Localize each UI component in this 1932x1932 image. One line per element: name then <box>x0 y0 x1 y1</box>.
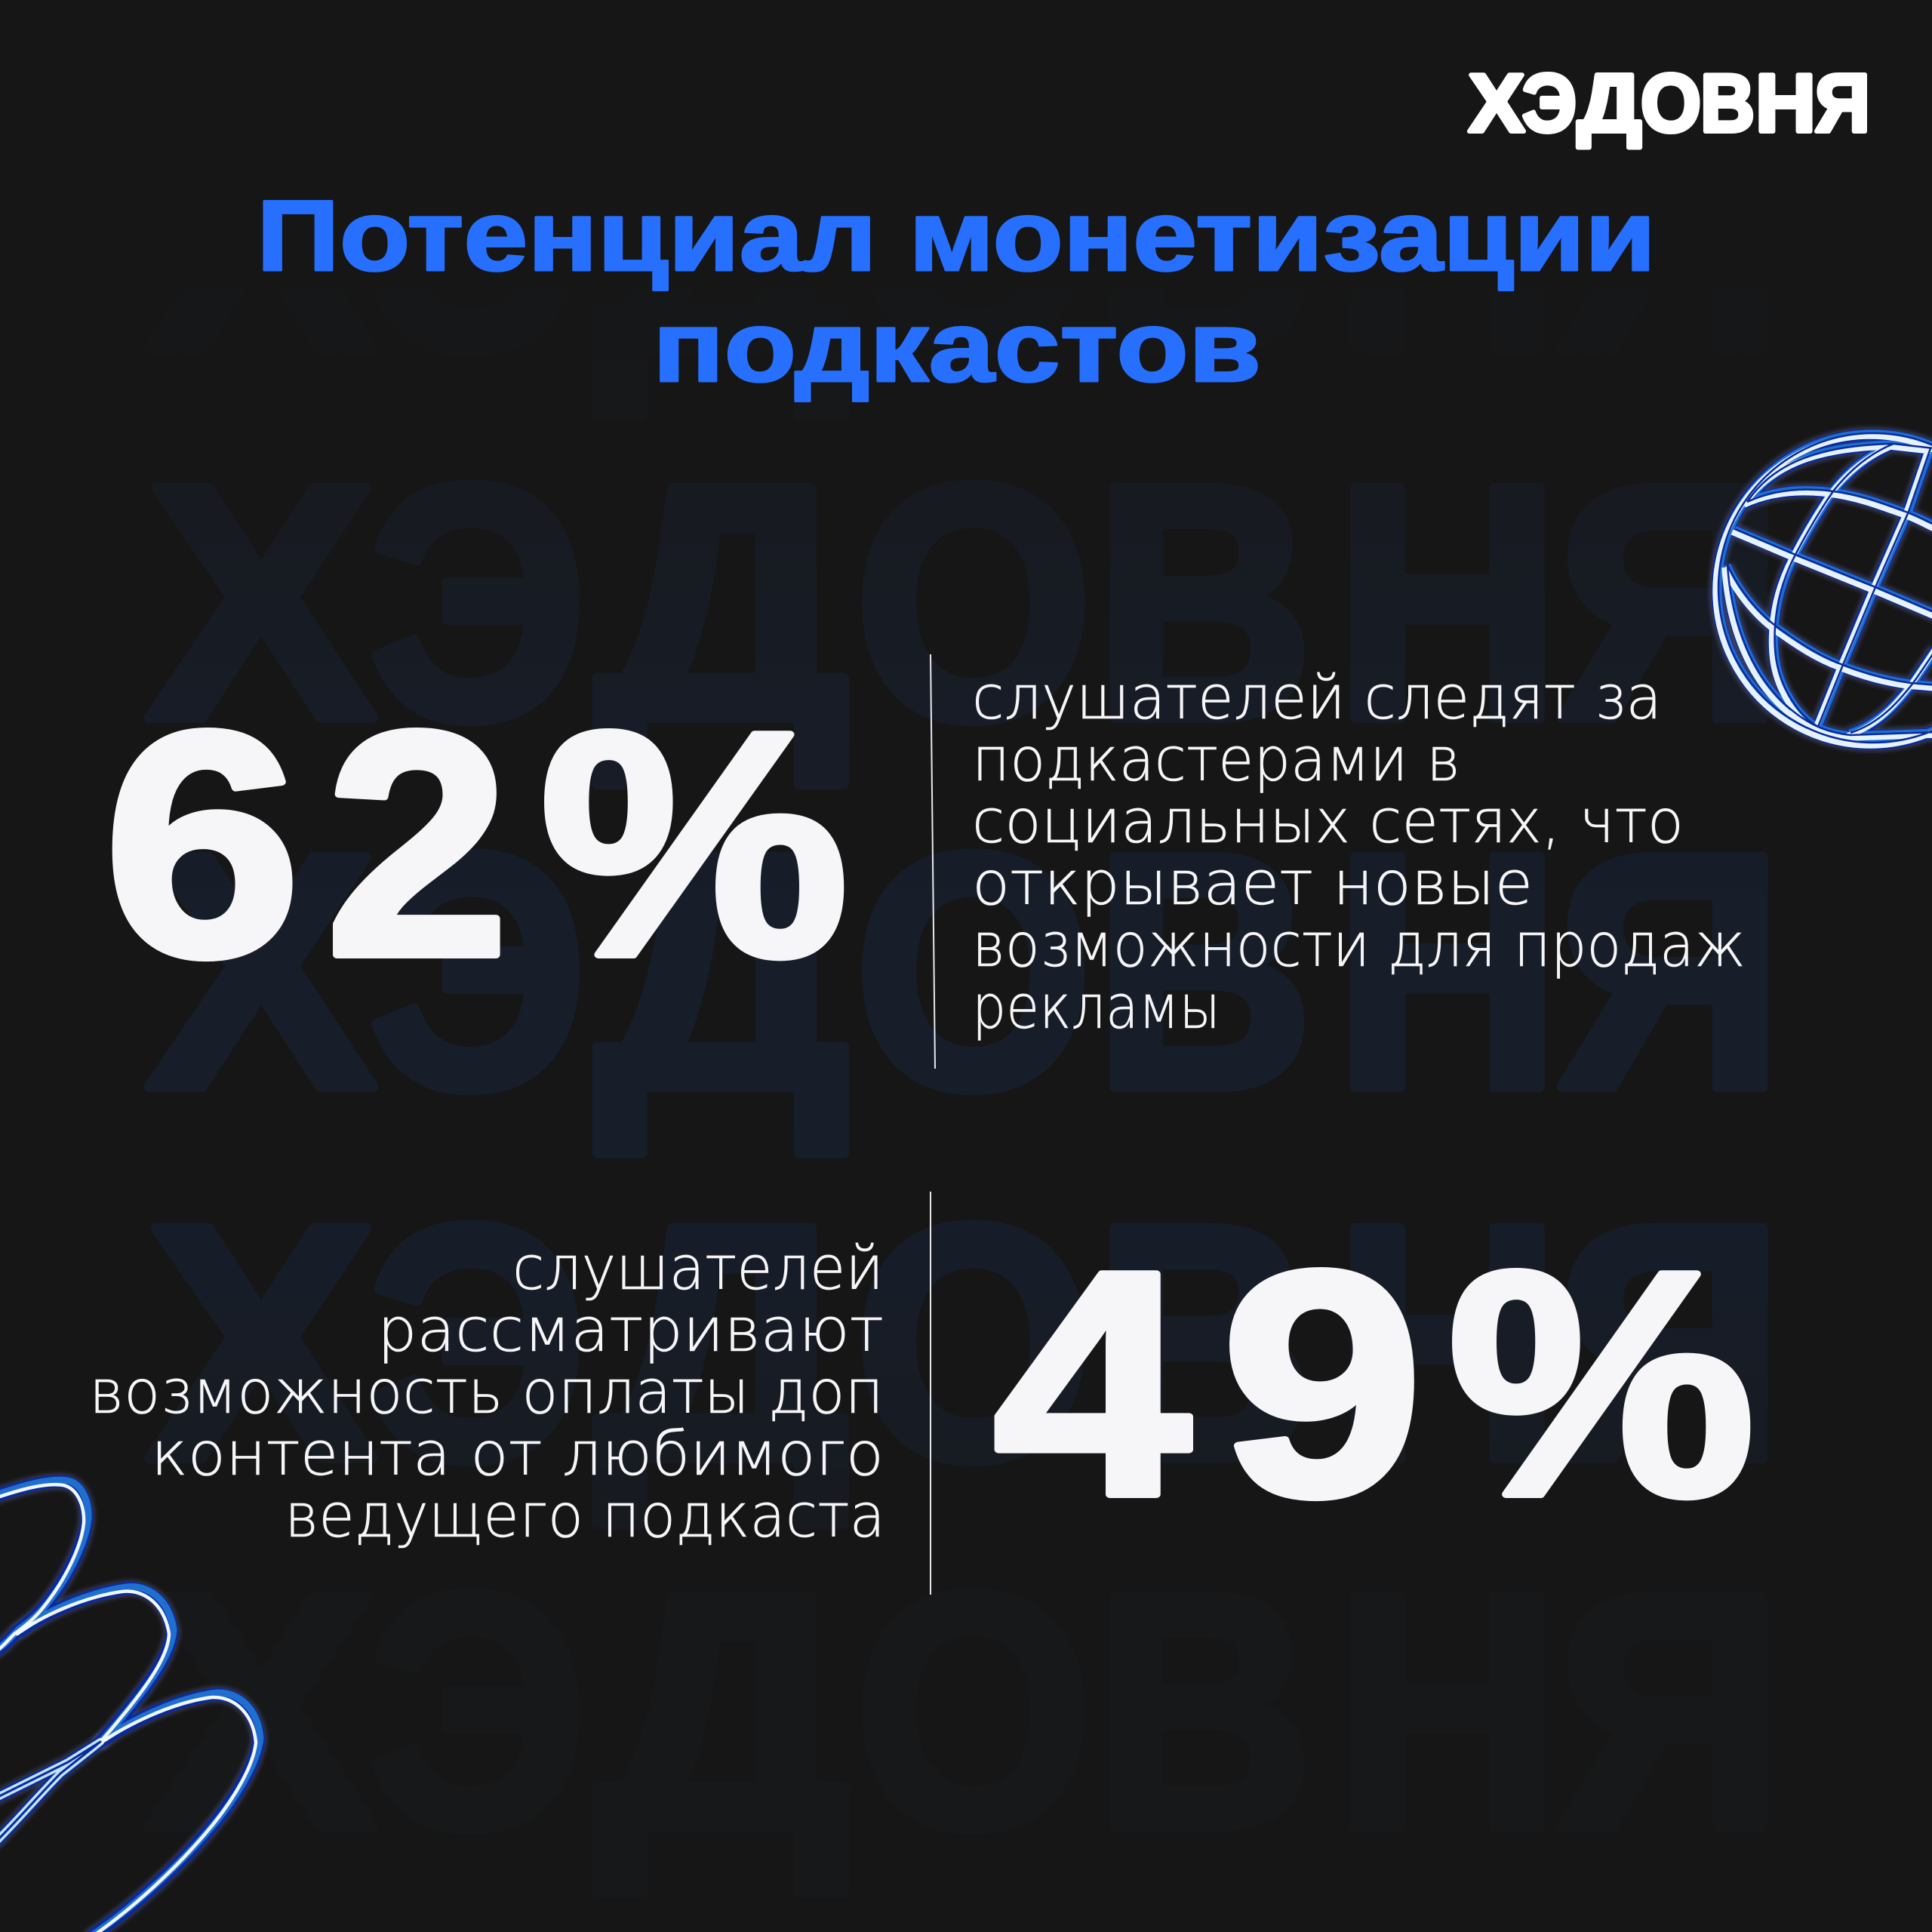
text: second statistic description: рассматривают <box>377 1295 884 1365</box>
logo: Н <box>1755 57 1816 149</box>
background watermark rows: Х <box>146 1156 377 1529</box>
background watermark rows: Н <box>1334 785 1561 1158</box>
background watermark rows: Х <box>146 47 377 420</box>
logo: В <box>1700 57 1755 149</box>
background watermark rows: Д <box>595 416 850 789</box>
background watermark rows: Х <box>146 1524 377 1897</box>
divider: second statistic <box>930 1192 931 1595</box>
icon: chrome globe <box>1715 433 1932 746</box>
background watermark rows: Я <box>1556 785 1784 1158</box>
background watermark rows: Э <box>368 47 587 420</box>
text: first statistic description: социальных сетях, что <box>972 786 1684 857</box>
background watermark rows: Н <box>1334 1156 1561 1529</box>
icon: chrome spiral <box>0 1480 260 1932</box>
logo: Я <box>1815 57 1870 149</box>
text: second statistic description: контента от любимого <box>151 1419 884 1489</box>
text: second statistic description: возможность оплаты доп <box>89 1357 884 1427</box>
background watermark rows: Э <box>368 1156 587 1529</box>
background watermark rows: Д <box>595 47 850 420</box>
background watermark rows: Н <box>1334 47 1561 420</box>
background watermark rows: Д <box>595 1524 850 1897</box>
statistic: 62%: 2 <box>325 665 509 1023</box>
text: second statistic description <box>89 1233 885 1551</box>
background watermark rows: Э <box>368 785 587 1158</box>
background watermark rows: В <box>1094 1524 1313 1897</box>
background watermark rows: О <box>854 1156 1093 1529</box>
background watermark rows: Я <box>1556 47 1784 420</box>
text: first statistic description <box>972 663 1746 1042</box>
logo: Э <box>1522 57 1577 149</box>
statistic: 62%: % <box>540 665 849 1023</box>
background watermark rows: Я <box>1556 416 1784 789</box>
background watermark rows: В <box>1094 47 1313 420</box>
title: подкастов <box>653 291 1261 403</box>
background watermark rows: Х <box>146 785 377 1158</box>
background watermark rows: В <box>1094 1156 1313 1529</box>
background watermark rows: О <box>854 1524 1093 1897</box>
text: second statistic description: ведущего подкаста <box>285 1481 885 1551</box>
background watermark rows: Д <box>595 785 850 1158</box>
title: Потенциал монетизации <box>257 180 1656 292</box>
background watermark rows: Я <box>1556 1524 1784 1897</box>
logo: Х <box>1469 57 1524 149</box>
background watermark rows: Д <box>595 1156 850 1529</box>
background watermark rows: Н <box>1334 1524 1561 1897</box>
divider: first statistic <box>931 654 935 1069</box>
statistic: 49%: 9 <box>1221 1204 1423 1562</box>
text: first statistic description: возможности для продаж <box>972 910 1746 980</box>
text: first statistic description: слушателей следят за <box>972 663 1662 733</box>
statistic: 49%: % <box>1447 1204 1755 1562</box>
statistic: 49%: 4 <box>993 1204 1193 1562</box>
background watermark rows: Э <box>368 1524 587 1897</box>
text: first statistic description: открывает новые <box>972 848 1533 918</box>
statistic: 62%: 6 <box>103 665 301 1023</box>
logo: Д <box>1577 57 1641 149</box>
background watermark rows: Н <box>1334 416 1561 789</box>
background watermark rows: О <box>854 785 1093 1158</box>
text: first statistic description: подкастерами в <box>972 724 1460 795</box>
text: first statistic description: рекламы <box>972 972 1220 1042</box>
title <box>257 180 1656 403</box>
background watermark rows: В <box>1094 416 1313 789</box>
background watermark rows: О <box>854 47 1093 420</box>
background watermark rows: Х <box>146 416 377 789</box>
background watermark rows: О <box>854 416 1093 789</box>
background watermark rows: В <box>1094 785 1313 1158</box>
background watermark rows: Э <box>368 416 587 789</box>
logo: О <box>1641 57 1701 149</box>
background watermark rows: Я <box>1556 1156 1784 1529</box>
text: second statistic description: слушателей <box>512 1233 884 1303</box>
